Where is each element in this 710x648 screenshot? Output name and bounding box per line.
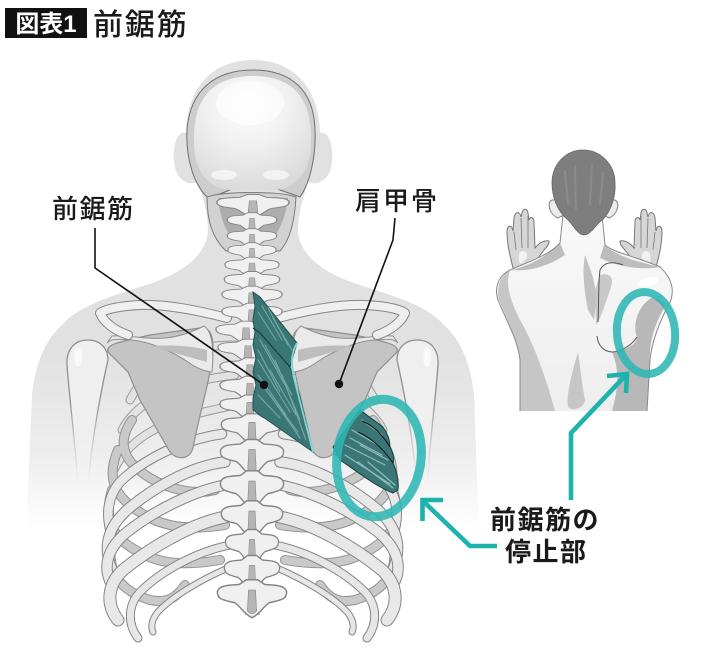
- torso: [496, 215, 672, 411]
- title text: 前鋸筋: [93, 9, 188, 42]
- highlight ring on back figure: [614, 290, 678, 376]
- right shoulder bones: [278, 305, 438, 485]
- title badge: [5, 8, 87, 38]
- label: 前鋸筋: 前鋸筋: [52, 194, 135, 224]
- leader: 肩甲骨: [335, 218, 395, 388]
- right hand: [620, 209, 662, 270]
- arrow to back figure ring: [571, 374, 627, 500]
- left shoulder bones: [67, 305, 227, 485]
- title: [5, 8, 188, 42]
- panel: skeleton back view: [26, 60, 479, 638]
- callout label: [490, 505, 600, 567]
- left hand: [507, 209, 549, 270]
- callout line 1: 前鋸筋の: [490, 505, 600, 535]
- panel: small back figure: [496, 150, 678, 411]
- callout line 2: 停止部: [505, 537, 588, 567]
- serratus anterior muscle, medial part: [253, 292, 313, 452]
- body silhouette: [26, 60, 479, 535]
- highlight ring on skeleton: [329, 394, 429, 522]
- arrow to skeleton ring: [422, 500, 497, 546]
- skull: [187, 70, 315, 251]
- ribs: [107, 345, 398, 638]
- label: 肩甲骨: 肩甲骨: [355, 186, 439, 216]
- head with hair: [549, 150, 618, 235]
- title badge: 図表1: [15, 11, 77, 38]
- leader: 前鋸筋: [95, 228, 268, 389]
- spine: [216, 194, 289, 618]
- serratus anterior muscle, insertion slips: [333, 410, 398, 493]
